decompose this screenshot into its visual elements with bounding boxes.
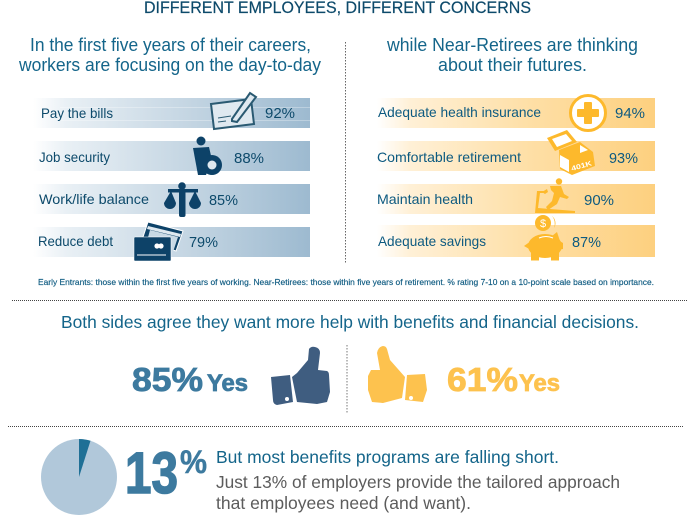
callout text [216, 447, 620, 513]
bar: reduce debt [33, 227, 310, 257]
panel: near-retiree concerns [377, 96, 655, 260]
bar: adequate savings [377, 225, 655, 257]
bar: comfortable retirement [377, 141, 655, 171]
bar: job security: 88% [234, 151, 264, 167]
bar: pay the bills [33, 98, 310, 128]
stat: 85% yes: 85% [132, 361, 203, 398]
bar: adequate health insurance: 94% [615, 106, 645, 122]
bar: reduce debt: 79% [189, 235, 218, 251]
bar: work/life balance [33, 184, 310, 214]
bar: pay the bills: Pay the bills [41, 105, 113, 121]
icon: 401k box [547, 130, 595, 175]
heading: early entrants [18, 35, 321, 75]
bar: maintain health [377, 184, 655, 214]
bar: maintain health: 90% [584, 193, 614, 209]
footnote: Early Entrants: those within the first five years of working. Near-Retirees: those within five years of retirement. % rating 7-10 on a 10-point scale based on importance. [38, 277, 654, 287]
bar: maintain health: Maintain health [377, 191, 473, 207]
icon: balance scales [164, 182, 201, 217]
bar: adequate health insurance [377, 98, 655, 128]
bar: pay the bills: 92% [265, 106, 295, 122]
bar: comfortable retirement: 93% [609, 151, 638, 167]
stat: 61% yes: 61% [447, 361, 518, 398]
icon: yellow thumbs up [368, 346, 427, 403]
icon: worker with gear [193, 136, 222, 175]
icon: credit cards [134, 222, 183, 261]
stat: 61% yes [447, 361, 560, 398]
heading: early entrants: workers are focusing on the day-to-day [18, 55, 321, 75]
heading: near-retirees: about their futures. [438, 55, 587, 75]
stat: 13%: % [180, 444, 207, 480]
callout text: But most benefits programs are falling short. [216, 447, 559, 467]
icon: piggy bank [524, 215, 563, 260]
stat: 61% yes: Yes [519, 370, 560, 397]
callout text: that employees need (and want). [216, 493, 471, 513]
icon: cheque and pen [211, 93, 256, 129]
bar: adequate health insurance: Adequate health insurance [378, 104, 541, 120]
icon: blue thumbs up [271, 347, 330, 405]
callout text: Just 13% of employers provide the tailored approach [216, 472, 620, 492]
stat: 13%: 13 [125, 441, 178, 506]
bar: adequate savings: Adequate savings [378, 233, 486, 249]
bar: work/life balance: 85% [209, 193, 238, 209]
heading: both sides agree: Both sides agree they want more help with benefits and financial decisions. [61, 312, 639, 332]
heading: near-retirees [386, 35, 638, 75]
icon: 401k box: 401K [571, 160, 593, 173]
pie chart: 13% [41, 439, 117, 515]
icon: piggy bank: $ [540, 218, 546, 230]
bar: work/life balance: Work/life balance [39, 191, 149, 207]
stat: 85% yes: Yes [207, 370, 248, 397]
heading: early entrants: In the first five years of their careers, [30, 35, 311, 55]
bar: adequate savings: 87% [572, 235, 601, 251]
bar: job security: Job security [39, 149, 110, 165]
icon: health plus [570, 96, 606, 130]
panel: early entrant concerns [33, 93, 310, 261]
icon: treadmill runner [535, 178, 575, 213]
stat: 85% yes [132, 361, 248, 398]
heading: near-retirees: while Near-Retirees are thinking [386, 35, 638, 55]
bar: reduce debt: Reduce debt [38, 233, 113, 249]
bar: job security [33, 141, 310, 171]
bar: comfortable retirement: Comfortable retirement [377, 149, 521, 165]
